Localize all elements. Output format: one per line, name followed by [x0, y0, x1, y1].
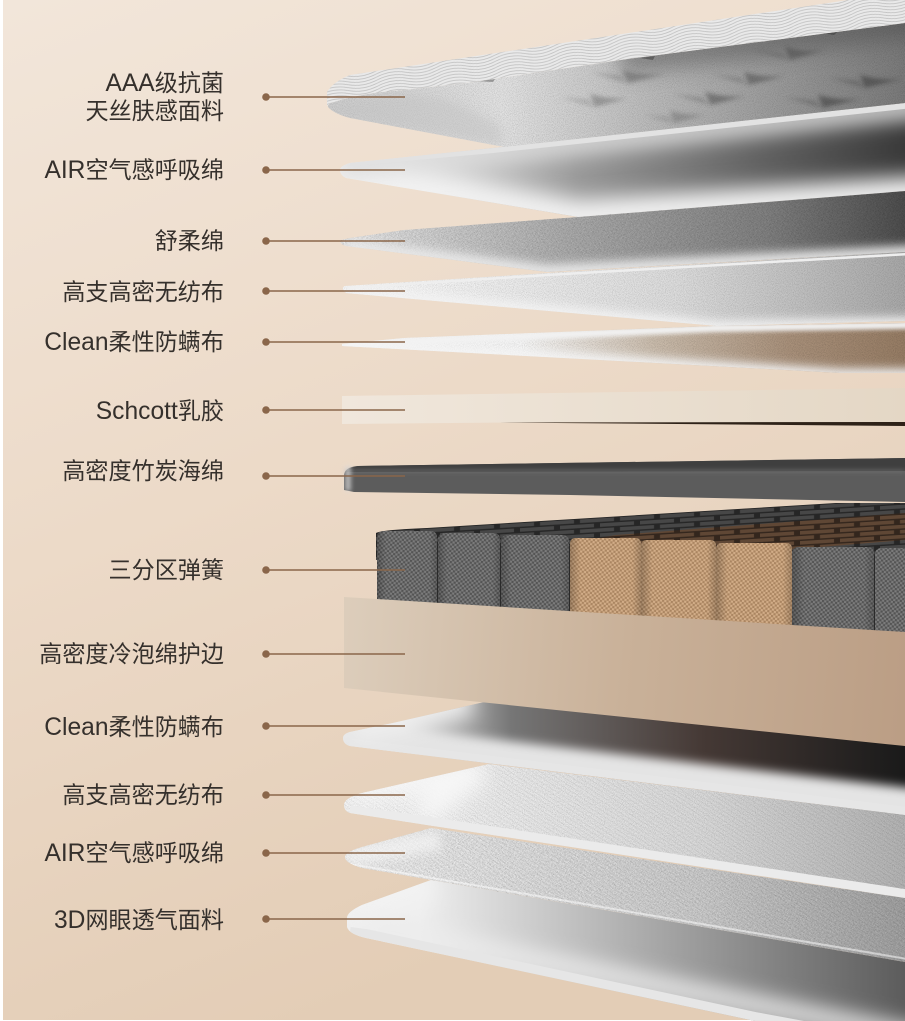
layer: non-woven fabric upper	[340, 250, 905, 330]
layer: Schcott latex	[342, 388, 905, 426]
callout: non-woven upper	[62, 279, 405, 305]
spring top surface	[376, 503, 905, 560]
callout: 3D mesh	[54, 907, 405, 934]
callout: Clean cloth upper	[44, 329, 405, 356]
layer: spring coils	[376, 503, 905, 640]
callout: non-woven upper: 高支高密无纺布	[62, 279, 224, 305]
callout: foam edge: 高密度冷泡绵护边	[39, 641, 224, 667]
callout: soft foam: 舒柔绵	[155, 228, 224, 254]
callout: Clean cloth lower	[44, 714, 405, 741]
beige coils center	[570, 538, 792, 633]
layer: Clean anti-mite cloth lower	[343, 702, 905, 815]
layer: non-woven fabric lower	[340, 760, 905, 902]
layer: AAA antibacterial tencel cover	[325, 0, 905, 150]
cover surface	[325, 16, 905, 150]
callout: foam edge	[39, 641, 405, 667]
white page edge left	[0, 0, 3, 1021]
layer: bamboo charcoal sponge	[344, 458, 905, 502]
layer: AIR foam lower	[345, 828, 905, 962]
callout: AAA cover: AAA级抗菌	[106, 70, 224, 97]
quilting tufts	[475, 31, 902, 123]
callout: non-woven lower	[62, 782, 405, 808]
callout: soft foam	[155, 228, 405, 254]
callout: latex	[96, 398, 405, 425]
callout: Clean cloth upper: Clean柔性防螨布	[44, 329, 224, 356]
callout: 3D mesh: 3D网眼透气面料	[54, 907, 224, 934]
callout: Clean cloth lower: Clean柔性防螨布	[44, 714, 224, 741]
layer: soft foam	[340, 190, 905, 275]
callout: bamboo sponge	[62, 458, 405, 484]
layer: 3D mesh fabric (bottom)	[340, 870, 905, 1021]
callout: AIR foam lower	[44, 840, 405, 867]
gray coils left	[377, 531, 569, 620]
layer: AIR breathable foam upper	[340, 100, 905, 220]
gray coils right	[792, 547, 905, 638]
callout: latex: Schcott乳胶	[96, 398, 224, 425]
layer: cold foam edge guard	[344, 597, 905, 746]
layer: Clean anti-mite cloth upper	[342, 323, 905, 373]
callout: springs	[109, 557, 405, 583]
callout: bamboo sponge: 高密度竹炭海绵	[62, 458, 224, 484]
callout: AIR foam lower: AIR空气感呼吸绵	[44, 840, 224, 867]
cover wavy top band	[327, 0, 905, 106]
callout: AIR foam upper	[44, 157, 405, 184]
callout: AAA cover	[85, 70, 405, 124]
callout: AIR foam upper: AIR空气感呼吸绵	[44, 157, 224, 184]
callout: non-woven lower: 高支高密无纺布	[62, 782, 224, 808]
callout: AAA cover: 天丝肤感面料	[85, 98, 224, 124]
callout: springs: 三分区弹簧	[109, 557, 224, 583]
coil gap shadow	[377, 540, 905, 640]
